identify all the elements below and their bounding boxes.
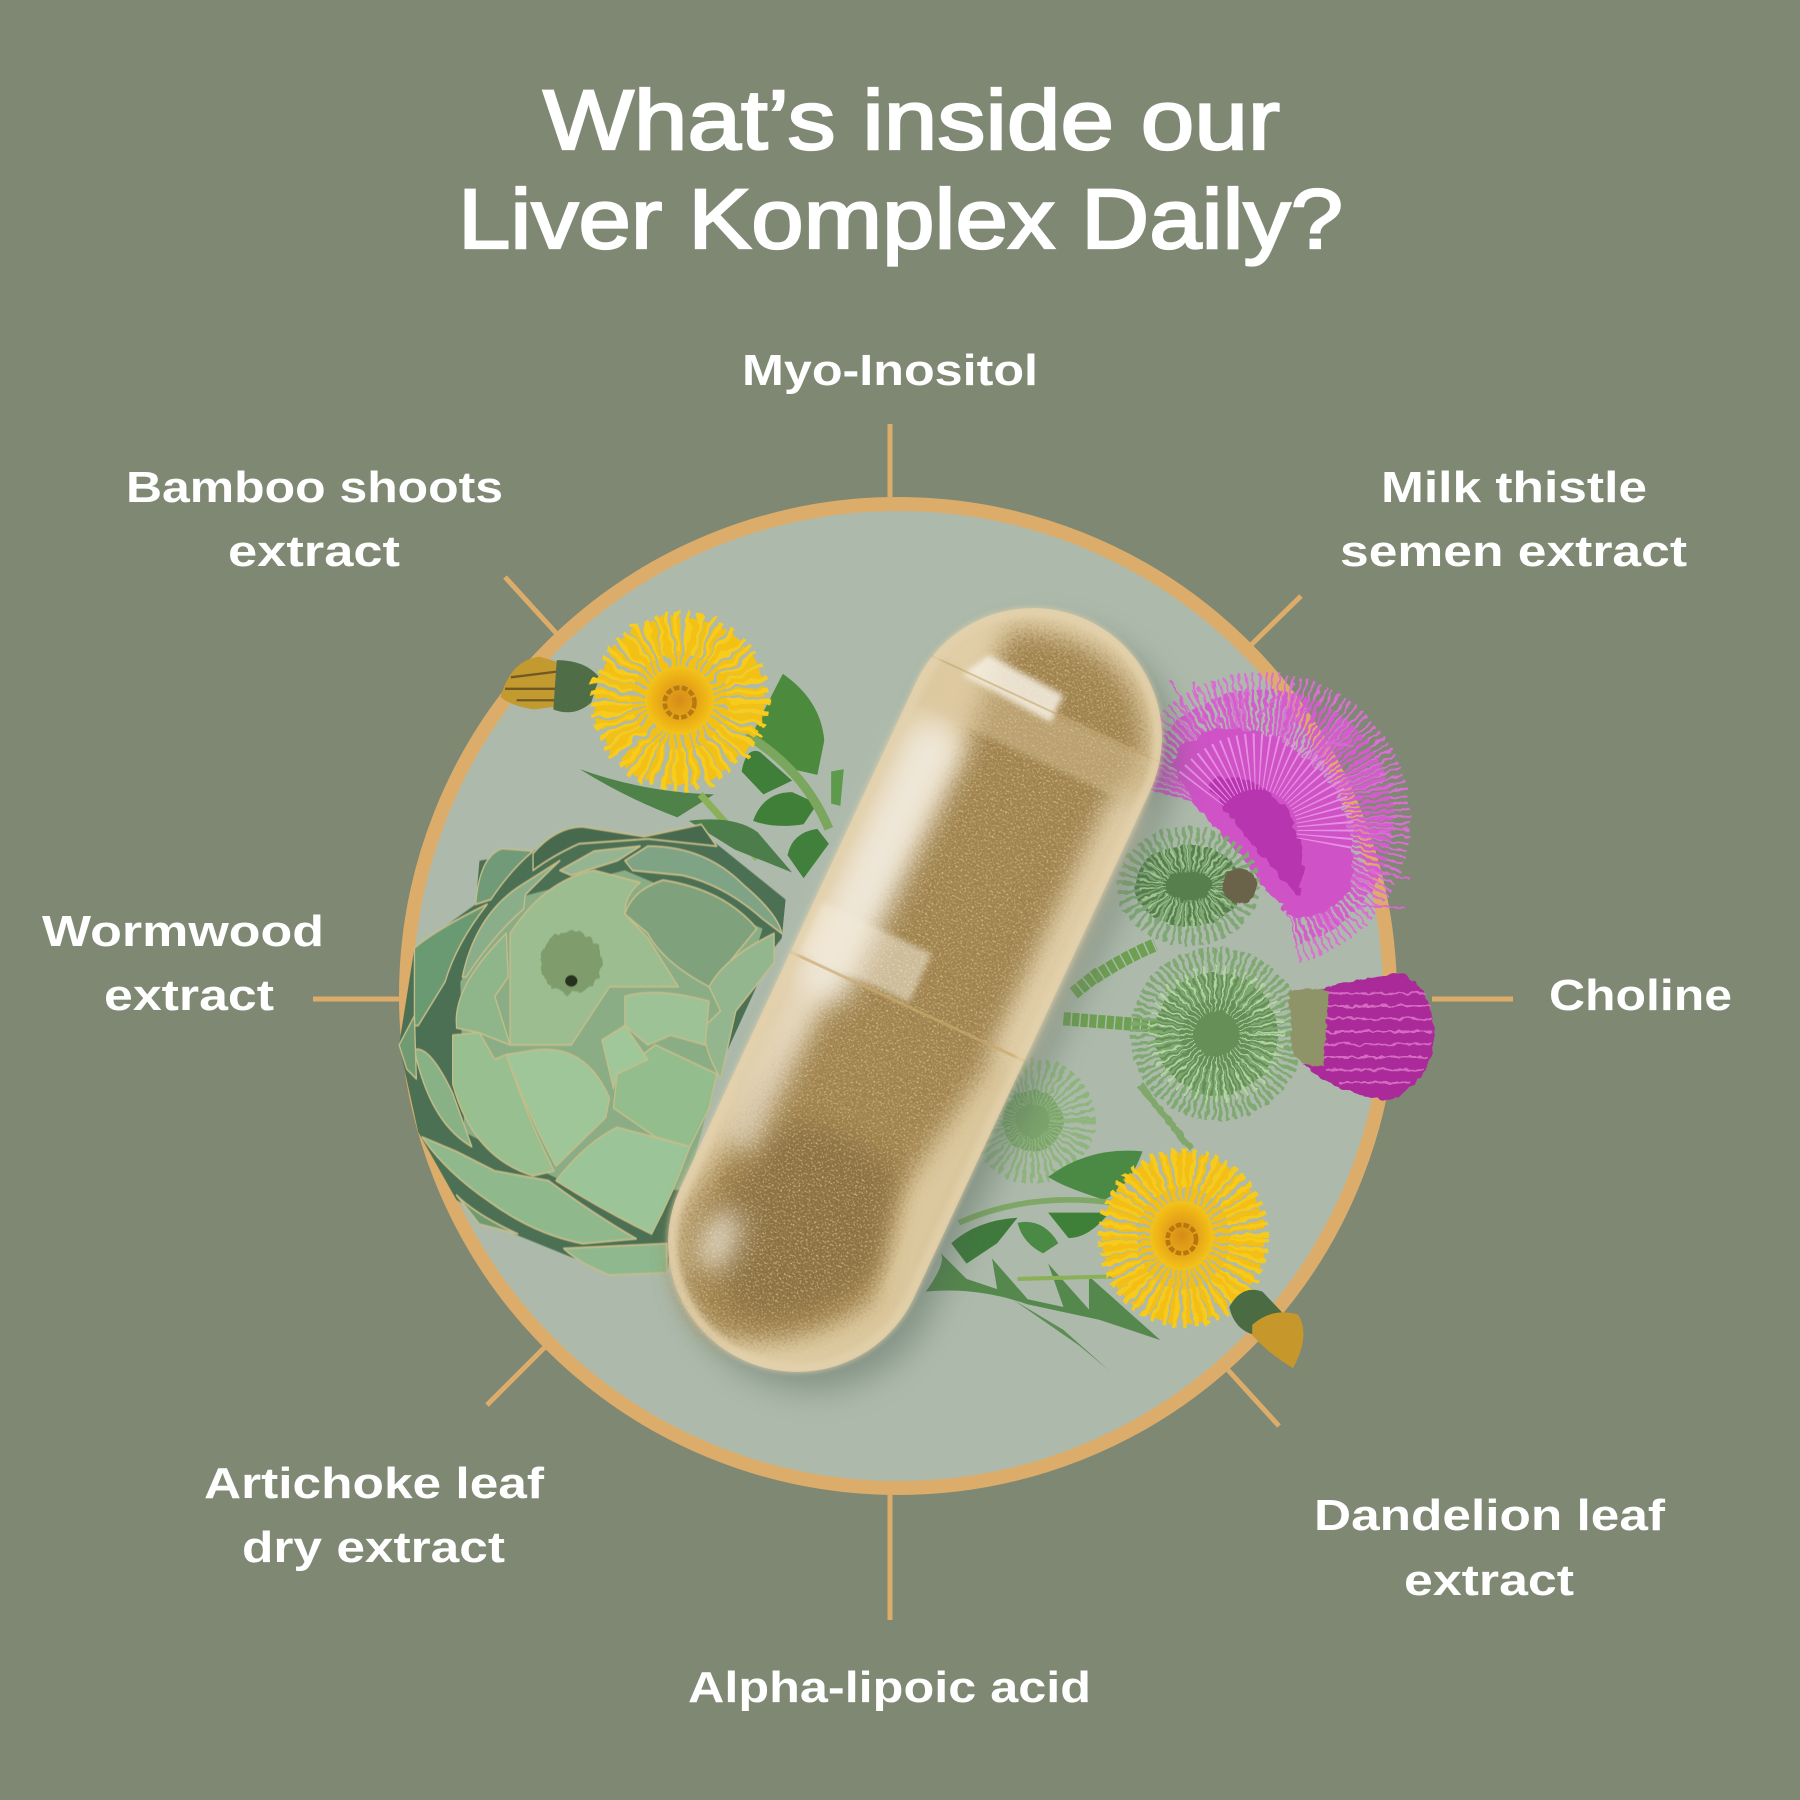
label: Artichoke leaf dry extract: Artichoke leaf — [204, 1459, 544, 1508]
capsule rim — [631, 571, 1199, 1409]
label: Myo-Inositol: Myo-Inositol — [742, 346, 1038, 395]
icon: thistle flower dark purple — [1288, 973, 1433, 1100]
label: Alpha-lipoic acid: Alpha-lipoic acid — [688, 1663, 1091, 1712]
label: Dandelion leaf extract: extract — [1404, 1556, 1574, 1605]
icon: thistle green bud lower — [1140, 973, 1278, 1149]
illustration: plants — [399, 631, 1433, 1371]
icon: thistle green bud upper — [1135, 845, 1257, 927]
title: Liver Komplex Daily? — [458, 172, 1343, 266]
label: Bamboo shoots extract — [126, 463, 503, 576]
icon: top dandelion foliage — [580, 674, 844, 878]
label: Dandelion leaf extract — [1314, 1491, 1665, 1605]
capsule joint — [790, 952, 1024, 1061]
panel: circle with gold ring — [406, 504, 1390, 1488]
label: Wormwood extract: extract — [104, 971, 274, 1020]
icon: bottom dandelion — [1117, 1168, 1250, 1308]
capsule top band — [917, 659, 1154, 805]
icon: bottom dandelion foliage — [926, 1151, 1160, 1371]
icon: top dandelion — [611, 631, 748, 769]
illustration: capsule — [621, 566, 1224, 1433]
label: Wormwood extract: Wormwood — [42, 907, 324, 956]
title — [458, 73, 1343, 266]
capsule dark lower powder — [688, 1104, 918, 1355]
label: Bamboo shoots extract: Bamboo shoots — [126, 463, 503, 512]
label: Milk thistle semen extract — [1340, 463, 1687, 576]
capsule powder — [645, 597, 1175, 1395]
label: Dandelion leaf extract: Dandelion leaf — [1314, 1491, 1665, 1540]
label: Wormwood extract — [42, 907, 324, 1020]
icon: top dandelion bud — [501, 657, 599, 712]
label: Artichoke leaf dry extract: dry extract — [242, 1523, 505, 1572]
label: Milk thistle semen extract: Milk thistle — [1381, 463, 1647, 512]
label: Artichoke leaf dry extract — [204, 1459, 544, 1572]
capsule highlights — [667, 697, 1144, 1352]
icon: thistle bud behind capsule — [993, 1081, 1073, 1161]
capsule shadow — [641, 584, 1220, 1433]
capsule shell — [626, 566, 1204, 1414]
label: Bamboo shoots extract: extract — [228, 527, 400, 576]
connector ticks — [313, 424, 1513, 1620]
label: Choline: Choline — [1549, 971, 1732, 1020]
label: Milk thistle semen extract: semen extract — [1340, 527, 1687, 576]
icon: thistle flower pink — [1169, 679, 1410, 917]
title: What’s inside our — [543, 73, 1280, 167]
icon: thistle stems — [1063, 945, 1160, 1026]
icons in the lower-right plant group — [926, 679, 1433, 1371]
icon: bottom dandelion bud — [1229, 1290, 1303, 1368]
icon: artichoke — [399, 824, 786, 1275]
